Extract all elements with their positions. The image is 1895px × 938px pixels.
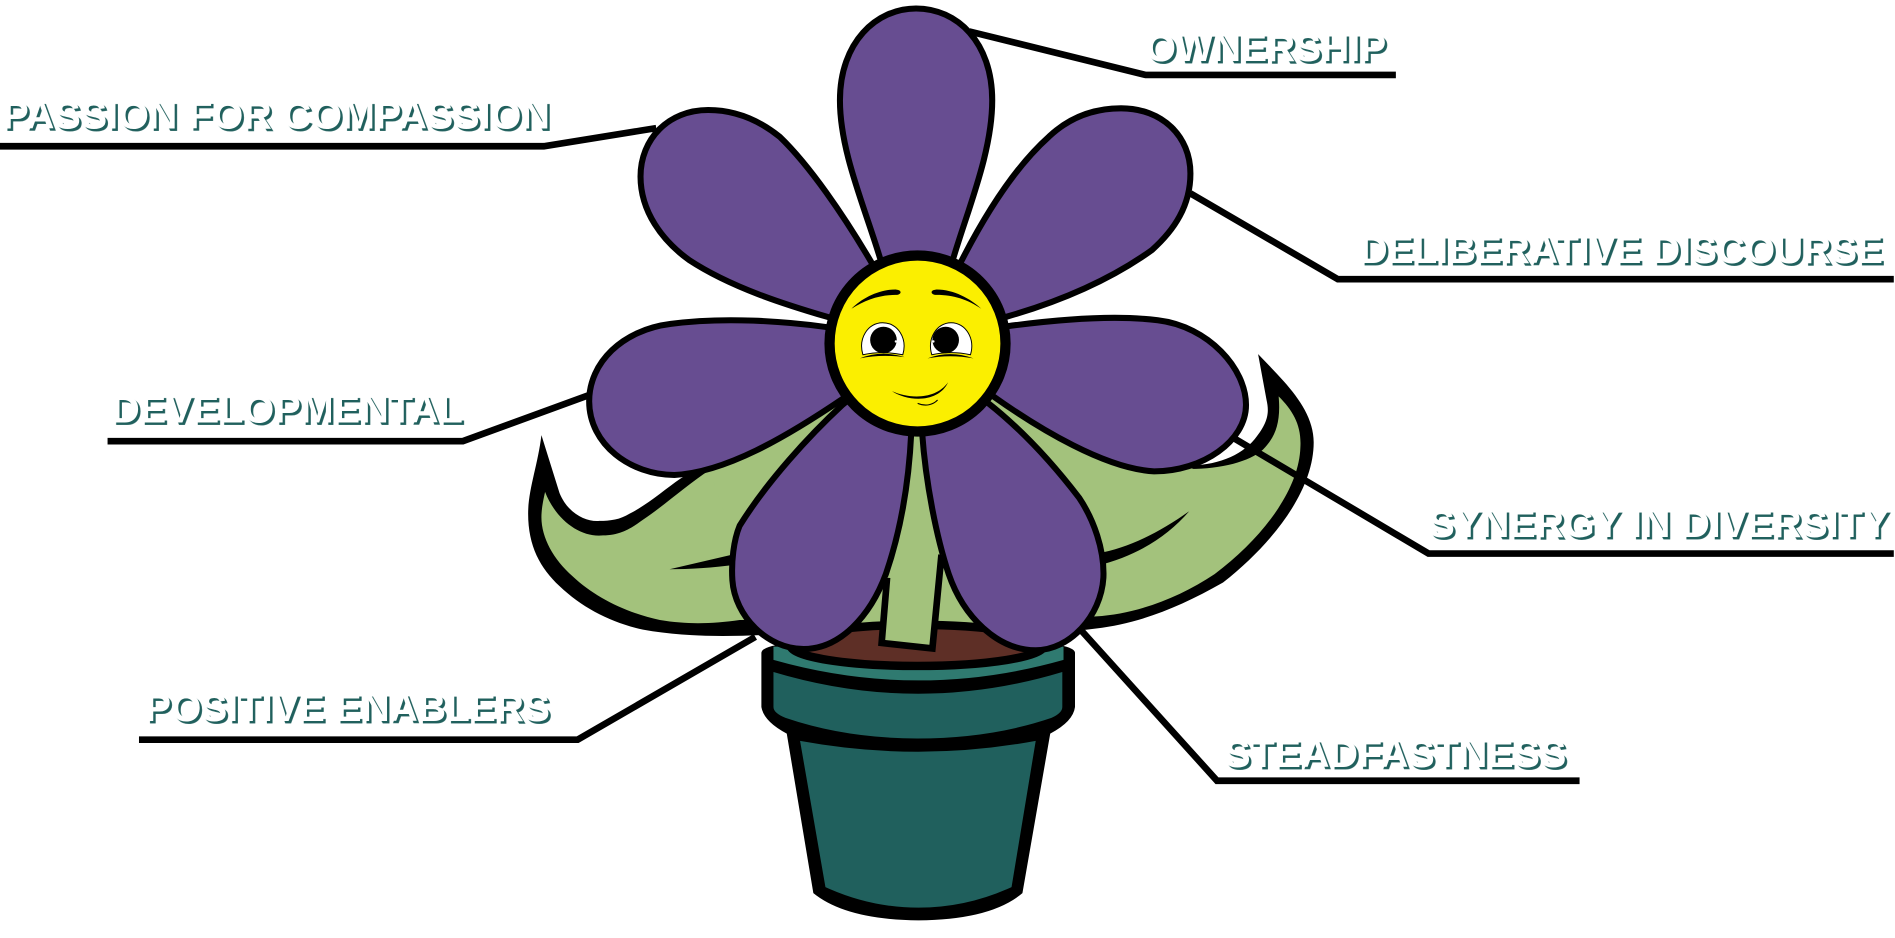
petal: upper left (641, 110, 917, 343)
line: steadfastness (1082, 631, 1580, 781)
label: passion for compassion: PASSION FOR COMPASSION (2, 95, 550, 138)
face disc (830, 256, 1006, 431)
flower face (830, 256, 1006, 431)
line: synergy in diversity (1233, 438, 1894, 554)
flower petals (589, 8, 1246, 650)
stem outline (882, 555, 941, 648)
label: deliberative discourse: DELIBERATIVE DISCOURSE (1360, 229, 1883, 272)
line: passion for compassion (0, 128, 656, 146)
flower pot (761, 625, 1075, 920)
pot outline (761, 638, 1075, 920)
right leaf vein (1097, 511, 1189, 566)
left eyebrow (851, 289, 901, 309)
pot rim highlight (773, 647, 1064, 680)
pot rim band (773, 672, 1062, 738)
right eye (928, 323, 973, 358)
chin line (918, 400, 938, 405)
smile (892, 382, 948, 399)
label: synergy in diversity: SYNERGY IN DIVERSITY (1429, 503, 1889, 546)
right leaf (1051, 354, 1314, 633)
right eyebrow (932, 289, 981, 309)
label: positive enablers: POSITIVE ENABLERS (145, 687, 550, 730)
soil (790, 625, 1044, 666)
line: positive enablers (139, 637, 755, 740)
petal: upper right (917, 108, 1190, 343)
label: ownership: OWNERSHIP (1146, 27, 1386, 70)
left leaf (528, 435, 786, 636)
petal: right (917, 318, 1246, 471)
line: deliberative discourse (1190, 193, 1894, 279)
line: ownership (969, 31, 1396, 75)
petal: lower right (917, 343, 1103, 650)
petal: left (589, 320, 917, 475)
label: steadfastness: STEADFASTNESS (1224, 733, 1566, 776)
petal: lower left (732, 343, 917, 649)
pot body (800, 741, 1036, 908)
petal: top (840, 8, 992, 343)
labels (2, 27, 1889, 776)
centre foliage behind petals (709, 393, 1196, 641)
leaves (528, 354, 1314, 641)
leader lines (0, 31, 1894, 781)
left leaf vein (670, 554, 737, 569)
label: developmental: DEVELOPMENTAL (111, 388, 463, 431)
left eye (860, 323, 905, 358)
stem (882, 555, 941, 648)
line: developmental (108, 395, 589, 441)
